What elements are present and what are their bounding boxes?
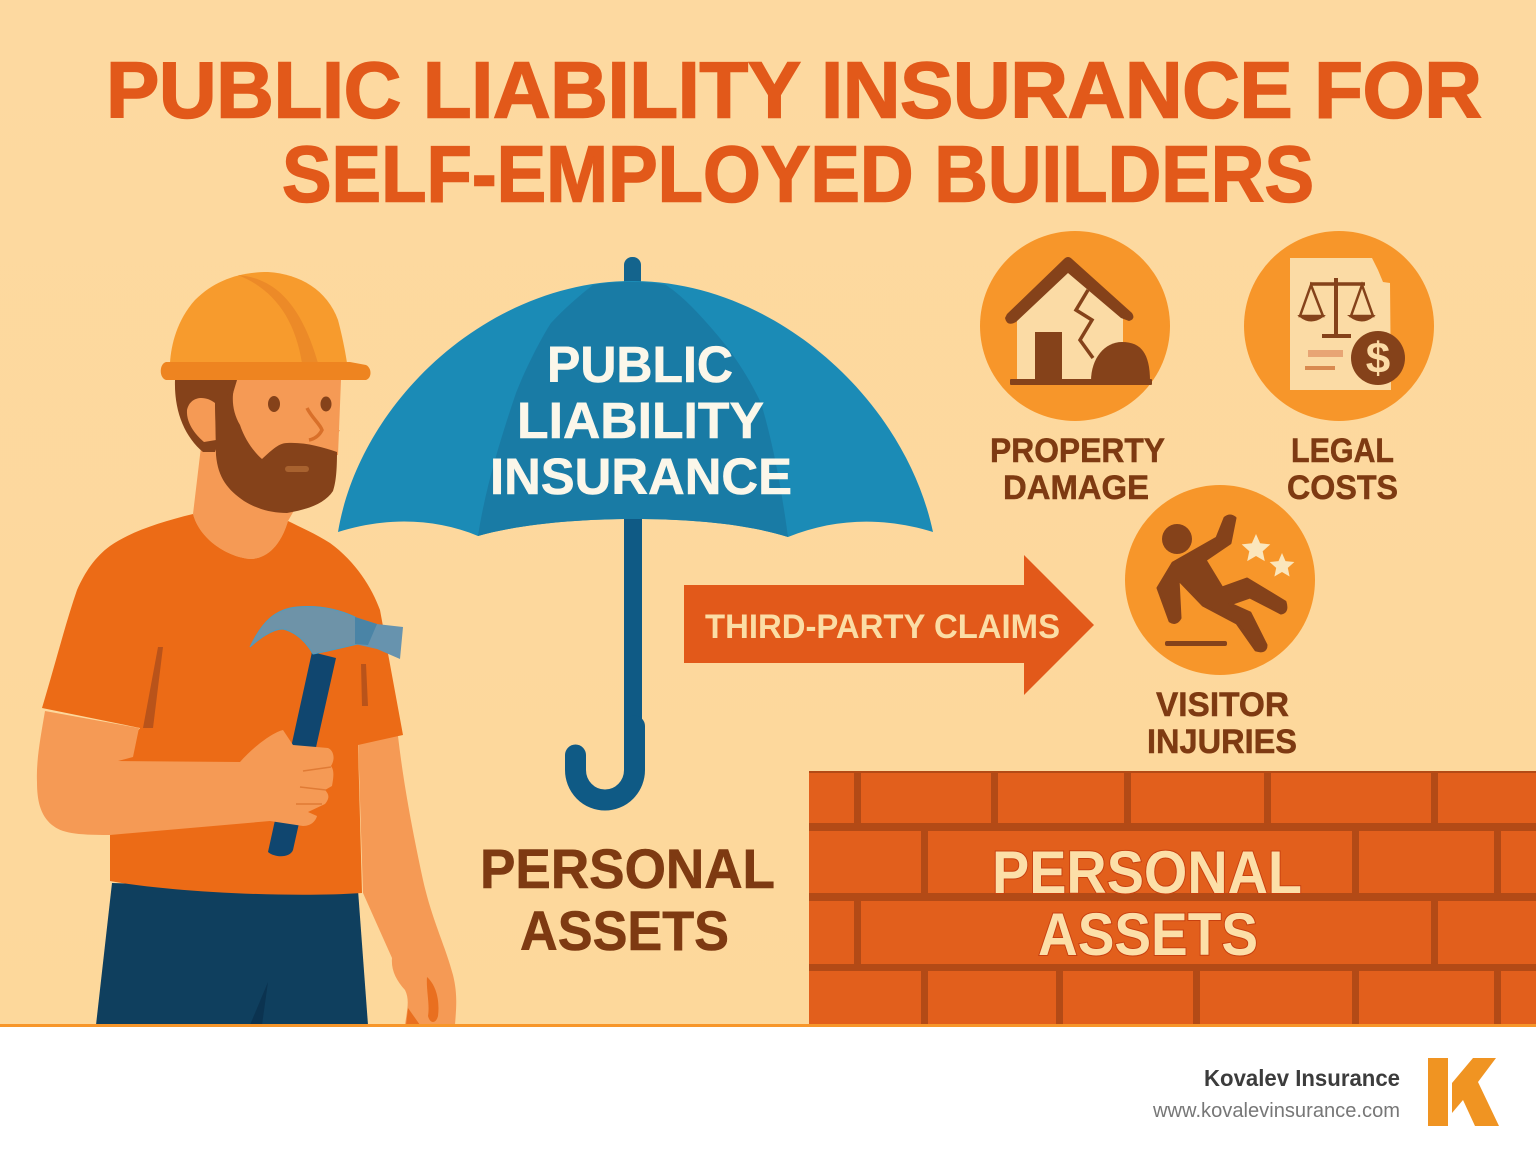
umbrella canopy bbox=[338, 281, 933, 537]
umbrella label: LIABILITY bbox=[517, 392, 764, 449]
falling figure bbox=[1158, 516, 1286, 651]
hard hat stripe bbox=[238, 275, 318, 363]
title: PUBLIC LIABILITY INSURANCE FOR bbox=[106, 46, 1482, 134]
footer brand text: www.kovalevinsurance.com bbox=[1152, 1100, 1400, 1122]
right hand thumb bbox=[406, 977, 439, 1025]
label: property damage: DAMAGE bbox=[1003, 469, 1149, 507]
floor line bbox=[1165, 641, 1227, 646]
house walls bbox=[1017, 268, 1123, 382]
umbrella label: PUBLIC bbox=[547, 336, 733, 393]
face bbox=[225, 380, 341, 470]
label: visitor injuries: VISITOR bbox=[1156, 686, 1289, 724]
umbrella ferrule bbox=[624, 257, 641, 289]
hair bbox=[175, 380, 240, 452]
hard hat dome bbox=[170, 272, 347, 363]
logo: K bbox=[1428, 1058, 1499, 1126]
title: SELF-EMPLOYED BUILDERS bbox=[282, 130, 1314, 218]
label: property damage bbox=[990, 432, 1165, 507]
trousers bbox=[96, 883, 368, 1025]
umbrella centre panel bbox=[478, 282, 788, 537]
impact stars bbox=[1242, 534, 1294, 576]
label: visitor injuries bbox=[1147, 686, 1297, 761]
shirt folds bbox=[143, 647, 368, 728]
title bbox=[106, 46, 1482, 218]
head bbox=[1162, 524, 1192, 554]
dollar coin bbox=[1351, 331, 1405, 385]
footer brand text bbox=[1152, 1065, 1400, 1122]
left arm and hand gripping hammer bbox=[37, 711, 334, 835]
label: legal costs: COSTS bbox=[1287, 469, 1398, 507]
document bbox=[1290, 258, 1391, 390]
arrow: third-party claims bbox=[684, 555, 1094, 695]
trousers seam bbox=[250, 982, 268, 1025]
brick courses bbox=[809, 773, 1536, 1025]
house roof bbox=[1005, 257, 1133, 324]
text lines bbox=[1308, 350, 1343, 357]
footer brand text: Kovalev Insurance bbox=[1204, 1065, 1400, 1091]
wall crack bbox=[1076, 290, 1093, 358]
wall label: PERSONAL bbox=[992, 839, 1302, 906]
umbrella label: INSURANCE bbox=[490, 448, 792, 505]
label: legal costs bbox=[1287, 432, 1398, 507]
label: personal assets: PERSONAL bbox=[480, 837, 775, 900]
t-shirt bbox=[42, 514, 403, 895]
illustration: umbrella bbox=[338, 257, 933, 800]
footer rule bbox=[0, 1024, 1536, 1027]
wall label: ASSETS bbox=[1038, 901, 1258, 968]
arrow: third-party claims: THIRD-PARTY CLAIMS bbox=[705, 608, 1060, 646]
right arm bbox=[358, 736, 456, 1025]
eyes bbox=[268, 396, 332, 412]
icon: property damage bbox=[980, 231, 1170, 421]
illustration: builder with hammer bbox=[37, 272, 456, 1025]
hammer head bbox=[250, 607, 403, 659]
ear bbox=[187, 398, 216, 442]
scales of justice bbox=[1300, 278, 1373, 336]
mouth bbox=[285, 466, 309, 472]
label: personal assets: ASSETS bbox=[520, 899, 729, 962]
wall label bbox=[992, 839, 1302, 968]
icon: legal costs: $ bbox=[1366, 334, 1390, 383]
hard hat brim bbox=[161, 362, 370, 380]
icon: visitor injuries bbox=[1125, 485, 1315, 675]
label: personal assets bbox=[480, 837, 775, 962]
label: visitor injuries: INJURIES bbox=[1147, 723, 1297, 761]
rubble bbox=[1091, 342, 1150, 381]
neck bbox=[193, 430, 340, 559]
umbrella label bbox=[490, 336, 792, 505]
umbrella shaft bbox=[624, 515, 642, 730]
label: legal costs: LEGAL bbox=[1291, 432, 1394, 470]
finger creases bbox=[296, 767, 331, 804]
brick wall bbox=[809, 771, 1536, 1026]
icon: legal costs bbox=[1244, 231, 1434, 421]
nose bbox=[307, 408, 322, 440]
umbrella hook bbox=[576, 726, 634, 800]
beard bbox=[215, 380, 337, 513]
ground bbox=[1010, 379, 1152, 385]
door bbox=[1035, 332, 1062, 382]
hammer handle bbox=[268, 652, 336, 856]
label: property damage: PROPERTY bbox=[990, 432, 1165, 470]
